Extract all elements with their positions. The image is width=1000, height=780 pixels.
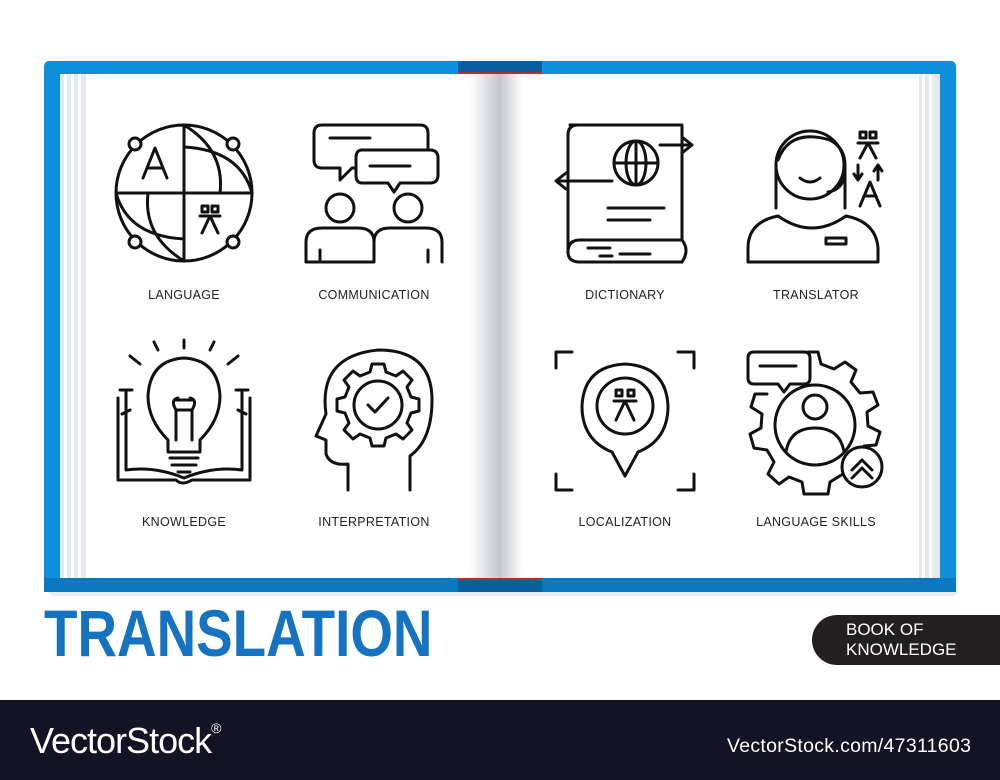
pages [60, 74, 940, 578]
icon: language skills [748, 352, 882, 494]
badge: KNOWLEDGE [846, 640, 957, 659]
label: translator: TRANSLATOR [773, 288, 859, 302]
label: communication: COMMUNICATION [318, 288, 430, 302]
badge [812, 615, 1000, 665]
badge: BOOK OF [846, 620, 923, 639]
icon: interpretation [316, 350, 432, 490]
title: TRANSLATION [44, 596, 432, 670]
label: dictionary: DICTIONARY [585, 288, 665, 302]
label: language: LANGUAGE [148, 288, 220, 302]
icon: knowledge [118, 340, 250, 483]
label: localization: LOCALIZATION [579, 515, 671, 529]
footer logo: VectorStock® [30, 720, 220, 761]
icon: translator [748, 131, 882, 262]
book cover [44, 61, 958, 596]
icon: communication [306, 125, 442, 262]
icon: language globe [116, 125, 252, 261]
label: language skills: LANGUAGE SKILLS [756, 515, 876, 529]
book [44, 61, 958, 596]
icon: localization [556, 352, 694, 490]
footer id: VectorStock.com/47311603 [727, 735, 971, 757]
label: interpretation: INTERPRETATION [318, 515, 430, 529]
footer bar [0, 700, 1000, 780]
label: knowledge: KNOWLEDGE [142, 515, 226, 529]
icon: dictionary [556, 125, 692, 262]
